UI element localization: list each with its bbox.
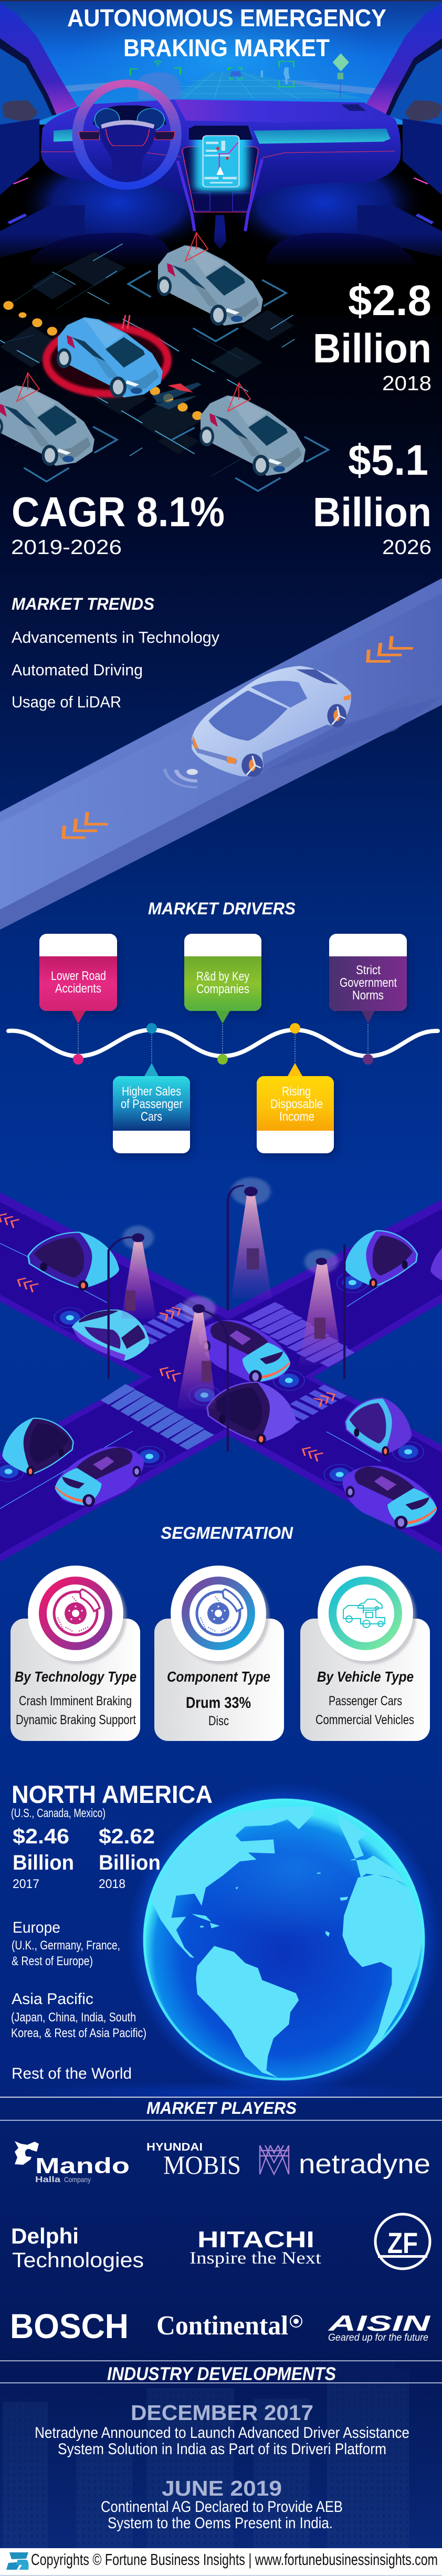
- industry developments heading: INDUSTRY DEVELOPMENTS: [107, 2364, 336, 2384]
- right A-pillar: [364, 3, 442, 116]
- logo: Aisin: AISIN: [328, 2311, 432, 2335]
- sensor waves: [165, 769, 198, 787]
- region block: north america: [11, 1780, 213, 1891]
- region block: north america: Billion: [13, 1851, 74, 1874]
- region block: asia pacific: Korea, & Rest of Asia Pacific): [11, 2026, 146, 2040]
- grid tiles and scan lines: [0, 244, 329, 491]
- driver card: R&D by key companies: Companies: [196, 982, 249, 996]
- region block: north america: Billion: [99, 1851, 161, 1874]
- heading: segmentation: SEGMENTATION: [161, 1524, 293, 1542]
- driver card: strict government norms: Government: [340, 976, 397, 990]
- title: BRAKING MARKET: [123, 34, 330, 61]
- stat: CAGR: CAGR 8.1%: [12, 488, 225, 535]
- development: June 2019: [101, 2476, 343, 2532]
- north america: [151, 1806, 314, 1958]
- street lamp: east: [299, 1244, 344, 1379]
- vehicle: centre dark pod: [207, 1382, 296, 1445]
- market trends block: Automated Driving: [12, 661, 143, 679]
- driver card: higher sales of passenger cars: Cars: [141, 1110, 162, 1124]
- stat: 2018 value: $2.8: [348, 277, 432, 325]
- street lamp: north: [228, 1177, 272, 1311]
- region block: europe: Europe: [13, 1919, 60, 1936]
- vehicle: centre sedan: [198, 1320, 290, 1383]
- logo: Hitachi: [190, 2227, 321, 2268]
- driver card: R&D by key companies: R&d by Key: [196, 969, 249, 984]
- air vents: [54, 129, 391, 144]
- building silhouettes: [3, 2362, 409, 2549]
- segment card: vehicle type: [300, 1566, 430, 1741]
- road chevrons: upper: [368, 636, 413, 661]
- red collision halo: [46, 327, 168, 394]
- logo: Mando: Company: [64, 2175, 91, 2184]
- development: June 2019: JUNE 2019: [162, 2476, 282, 2500]
- logo: Mando: Halla: [35, 2175, 60, 2184]
- market players band: [0, 2081, 442, 2121]
- logo: Continental: Continental: [156, 2311, 288, 2341]
- diagonal road: [0, 578, 442, 930]
- guard rails: [0, 79, 442, 102]
- stat: CAGR: [11, 488, 225, 559]
- vehicle ahead: [138, 72, 182, 99]
- segment card: component type: Drum 33%: [186, 1694, 251, 1712]
- vehicle: upper-right pod: [345, 1230, 417, 1288]
- vehicle: lower-right sedan: [343, 1466, 437, 1529]
- market players band: MARKET PLAYERS: [146, 2099, 297, 2118]
- segment card: component type: Component Type: [167, 1668, 270, 1685]
- vehicle: upper-left pod: [28, 1232, 119, 1290]
- road chevrons: lower: [64, 812, 108, 838]
- driver wave line: [8, 1023, 438, 1065]
- segment card: technology type: Crash Imminent Braking: [19, 1694, 132, 1708]
- driver card: higher sales of passenger cars: Higher Sales: [122, 1084, 181, 1099]
- side mirrors: [2, 100, 442, 122]
- orange sensor dots: [3, 301, 203, 420]
- crosswalk: north-west: [102, 1302, 203, 1361]
- road sign: [333, 53, 349, 98]
- logo: Mando: Mando: [35, 2153, 130, 2178]
- autonomous car on road: [192, 666, 442, 777]
- stat: 2018 value: Billion: [313, 325, 432, 371]
- driver card: rising disposable income: [257, 1063, 334, 1153]
- logo: ZF: ZF: [387, 2226, 418, 2259]
- segment card: vehicle type: Commercial Vehicles: [315, 1713, 414, 1727]
- car: top grey vehicle: [157, 233, 263, 326]
- windscreen sky: [0, 0, 442, 124]
- stat: 2026 value: $5.1: [348, 436, 428, 484]
- region block: europe: & Rest of Europe): [12, 1954, 93, 1968]
- market trends block: Usage of LiDAR: [12, 693, 121, 711]
- logo: Bosch: BOSCH: [10, 2307, 129, 2345]
- car: left grey vehicle: [0, 373, 94, 466]
- stat: 2018 value: [313, 277, 432, 395]
- street lamp: centre: [177, 1296, 228, 1452]
- door handles: [0, 178, 442, 257]
- icon: brake disc blue: [186, 1581, 251, 1646]
- smart-city intersection illustration: [0, 1177, 442, 1562]
- south america: [196, 1946, 299, 2078]
- car: highlighted blue vehicle: [57, 315, 163, 398]
- segment card: vehicle type: Passenger Cars: [329, 1694, 402, 1708]
- segment card: technology type: By Technology Type: [15, 1668, 136, 1685]
- vehicle: lower-left sedan: [55, 1447, 144, 1507]
- market trends block: [12, 595, 219, 711]
- lower cabin dark: [0, 129, 442, 316]
- road sensor pucks: [0, 1273, 424, 1485]
- logo: Hyundai Mobis: MOBIS: [163, 2150, 241, 2179]
- street lamp: west: [109, 1226, 156, 1379]
- logo: Aisin: [328, 2311, 432, 2343]
- region block: north america: $2.46: [13, 1825, 69, 1848]
- development: December 2017: [35, 2401, 409, 2458]
- dashboard: [41, 99, 401, 201]
- region block: north america: (U.S., Canada, Mexico): [11, 1806, 106, 1820]
- driver card: higher sales of passenger cars: [113, 1063, 190, 1153]
- stat: 2026 value: Billion: [313, 489, 432, 535]
- region block: rest of the world: Rest of the World: [12, 2065, 132, 2082]
- logo: Delphi Technologies: Delphi: [11, 2224, 79, 2248]
- region block: asia pacific: Asia Pacific: [12, 1990, 93, 2008]
- region block: asia pacific: [11, 1990, 146, 2040]
- vehicle: far-right pod: [432, 1232, 442, 1292]
- instrument cluster: [93, 106, 166, 131]
- stat: CAGR: 2019-2026: [11, 536, 122, 559]
- car interior illustration: [0, 0, 442, 316]
- road arrows: [0, 1214, 334, 1462]
- centre console: [177, 147, 262, 249]
- navigation display: [203, 135, 239, 187]
- driver card: rising disposable income: Income: [279, 1110, 314, 1124]
- development: December 2017: System Solution in India as Part of its Driveri Platform: [58, 2441, 386, 2458]
- vehicle: left dark pod: [3, 1418, 73, 1476]
- footer: [0, 2548, 442, 2576]
- segment card: component type: [154, 1566, 284, 1741]
- logo: Netradyne: [260, 2145, 430, 2179]
- driver card: R&D by key companies: [184, 934, 261, 1024]
- vehicle: white pod: [72, 1310, 150, 1361]
- segment card: component type: Disc: [208, 1714, 229, 1728]
- logo: Hitachi: Inspire the Next: [190, 2249, 321, 2268]
- driver card: rising disposable income: Rising: [282, 1084, 311, 1099]
- logo: Delphi Technologies: [11, 2224, 144, 2272]
- logo: Hyundai Mobis: [146, 2141, 241, 2179]
- driver card: lower road accidents: [39, 934, 117, 1024]
- crosswalk: south-east: [244, 1385, 347, 1441]
- africa: [342, 1874, 424, 2057]
- vehicle: right pod: [345, 1398, 411, 1456]
- stat: 2026 value: 2026: [382, 536, 432, 559]
- side windows: [0, 48, 56, 133]
- islands: [192, 1873, 348, 1937]
- logo: Netradyne: netradyne: [299, 2149, 430, 2179]
- heading: market drivers: MARKET DRIVERS: [148, 899, 296, 918]
- region block: asia pacific: (Japan, China, India, South: [11, 2010, 136, 2025]
- industry developments heading: [0, 2360, 442, 2384]
- segment card: technology type: [10, 1566, 140, 1741]
- cabin fade to black: [0, 233, 442, 267]
- logo: Hitachi: HITACHI: [197, 2227, 314, 2252]
- driver card: lower road accidents: Accidents: [55, 982, 101, 996]
- region block: europe: [12, 1919, 120, 1968]
- detection brackets, distant car and pedestrian: [130, 61, 294, 87]
- title: AUTONOMOUS EMERGENCY: [67, 4, 386, 32]
- icon: brake disc: [43, 1581, 108, 1646]
- logo: Delphi Technologies: Technologies: [12, 2249, 144, 2272]
- logo: ZF: [375, 2214, 430, 2269]
- region block: north america: $2.62: [99, 1825, 155, 1848]
- globe: [127, 1782, 441, 2097]
- europe: [338, 1814, 406, 1884]
- icon: Fortune Business Insights logo: [6, 2552, 28, 2570]
- logo: Aisin: Geared up for the future: [328, 2332, 428, 2343]
- logo: Mando: [15, 2141, 130, 2184]
- steering wheel: [78, 84, 176, 186]
- region block: north america: 2017: [13, 1877, 39, 1891]
- region block: north america: 2018: [99, 1877, 125, 1891]
- logo: Hyundai Mobis: HYUNDAI: [146, 2141, 203, 2153]
- market trends block: MARKET TRENDS: [12, 595, 155, 613]
- driver card: higher sales of passenger cars: of Passenger: [121, 1097, 183, 1111]
- driver card: strict government norms: Strict: [356, 963, 381, 977]
- crossroads: [0, 1193, 442, 1562]
- region block: europe: (U.K., Germany, France,: [12, 1938, 120, 1953]
- stat: 2018 value: 2018: [382, 372, 432, 395]
- development: June 2019: Continental AG Declared to Provide AEB: [101, 2498, 343, 2516]
- left A-pillar: [0, 3, 78, 116]
- development: June 2019: System to the Oems Present in India.: [108, 2515, 333, 2532]
- segment card: vehicle type: By Vehicle Type: [317, 1668, 414, 1685]
- display glow: [195, 131, 248, 191]
- seats: [28, 233, 417, 265]
- driver card: lower road accidents: Lower Road: [51, 969, 106, 983]
- region block: north america: NORTH AMERICA: [12, 1780, 213, 1808]
- segment card: technology type: Dynamic Braking Support: [16, 1713, 136, 1727]
- driver card: strict government norms: [329, 934, 407, 1024]
- stat: 2026 value: [313, 436, 432, 559]
- market trends block: Advancements in Technology: [12, 628, 219, 646]
- highway ahead: [169, 72, 364, 99]
- crosswalk: north-east: [242, 1302, 355, 1367]
- car: right grey vehicle: [199, 383, 306, 476]
- development: December 2017: DECEMBER 2017: [131, 2401, 313, 2425]
- driver card: rising disposable income: Disposable: [270, 1097, 323, 1111]
- lane lines: [0, 1243, 413, 1509]
- icon: vehicles: [333, 1581, 398, 1646]
- title: [67, 4, 386, 61]
- crosswalk: south-west: [101, 1384, 214, 1450]
- driver card: strict government norms: Norms: [352, 988, 384, 1003]
